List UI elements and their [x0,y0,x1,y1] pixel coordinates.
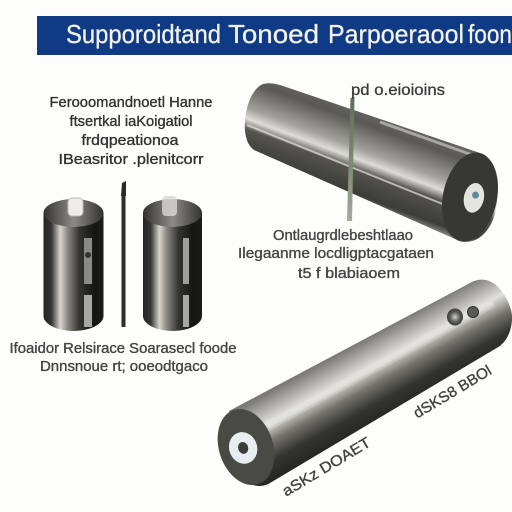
capacitor captions: Ifoaidor Relsirace Soarasecl foode [10,341,236,357]
upper cylinder label: pd o.eioioins [351,82,445,99]
middle text block: t5 f blabiaoem [298,266,400,282]
left text block [50,95,213,168]
capacitor captions: Dnnsnoue rt; ooeodtgaco [40,359,208,375]
lower diagonal cylinder [208,280,512,492]
cylinder end cap [434,147,506,247]
rotated label: lower left: aSKz DOAET [279,434,374,500]
right capacitor [143,196,202,331]
center probe rod [121,181,126,327]
middle text block [238,228,434,282]
title: Parpoeraool [328,19,464,49]
title: Supporoidtand [66,19,221,49]
vertical leader line [347,97,354,221]
cylinder end cap [208,402,284,492]
indicator buttons [447,306,478,326]
left text block: ftsertkal iaKoigatiol [70,114,192,130]
capacitor captions [10,341,236,375]
rotated label: lower right: dSKS8 BBOl [411,362,495,422]
left capacitor [44,198,104,331]
middle text block: Ontlaugrdlebeshtlaao [273,228,413,244]
title [66,19,512,49]
left text block: Ferooomandnoetl Hanne [50,95,213,111]
middle text block: Ilegaanme locdligptacgataen [238,246,434,262]
left text block: IBeasritor .plenitcorr [58,152,204,168]
left text block: frdqpeationoa [82,133,180,149]
upper horizontal cylinder [245,83,506,247]
title: Tonoed [228,19,319,49]
header banner [37,16,512,55]
